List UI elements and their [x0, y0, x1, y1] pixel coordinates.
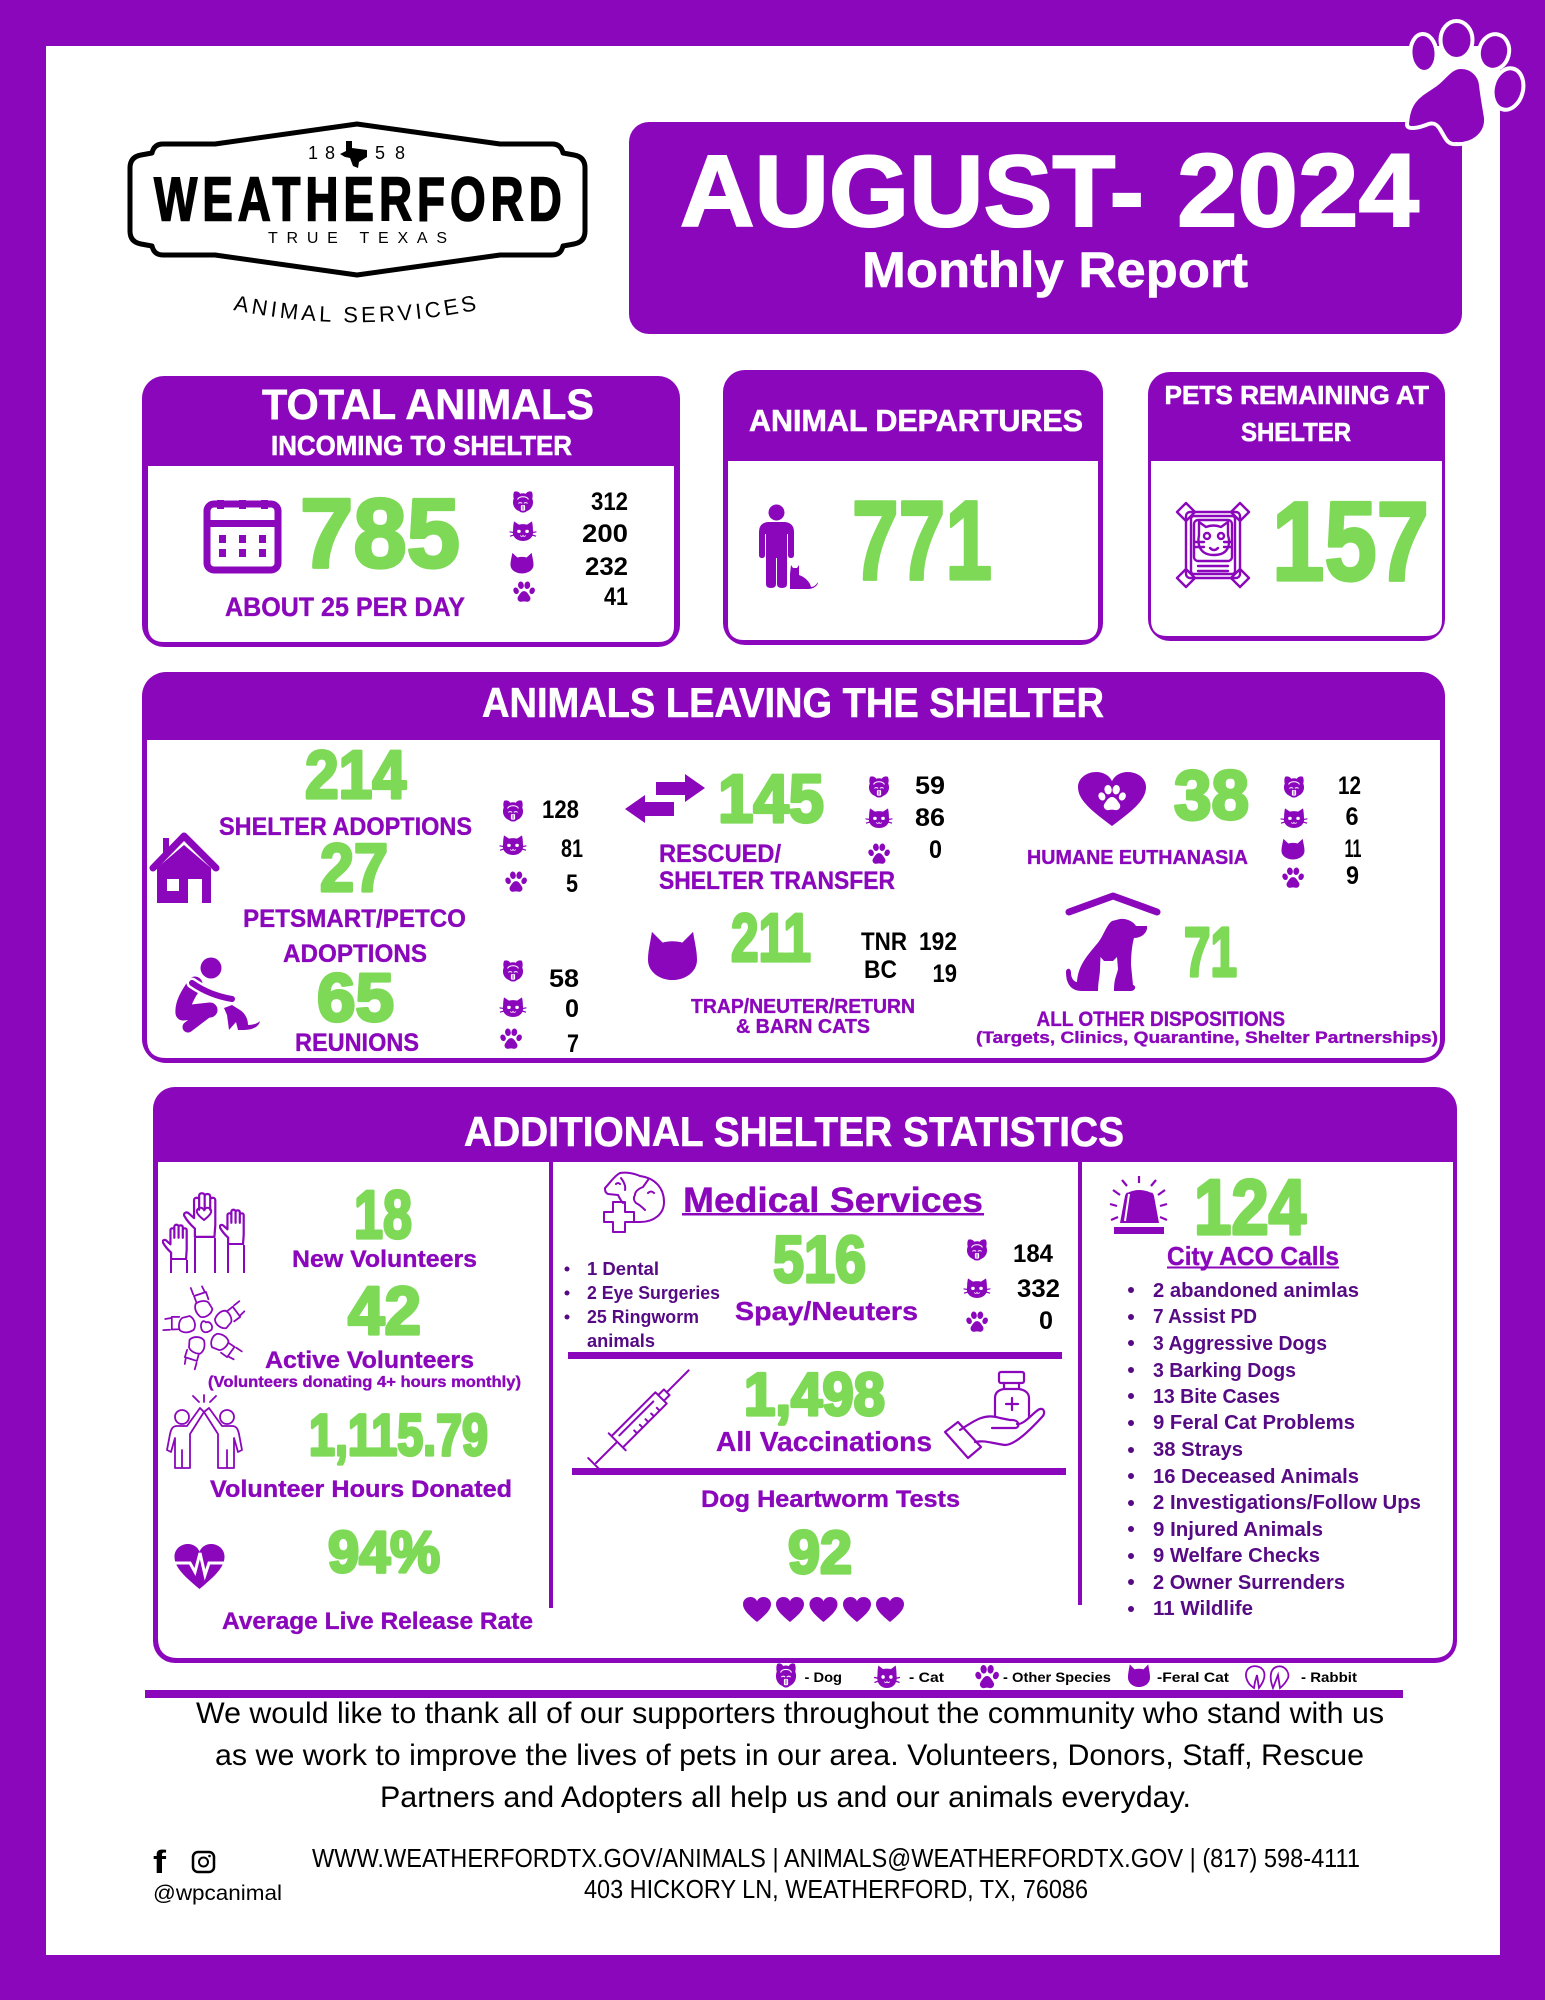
other dispositions label: ALL OTHER DISPOSITIONS: [1036, 1008, 1285, 1031]
euthanasia species counts: 6: [1346, 803, 1358, 831]
aco calls list: 2 Investigations/Follow Ups: [1153, 1492, 1421, 1514]
tnr label line 1: TRAP/NEUTER/RETURN: [691, 995, 915, 1018]
panel frame: [153, 1087, 1457, 1663]
legend: - Cat: [909, 1669, 944, 1685]
main title: 2024: [1177, 133, 1419, 249]
reunion species counts: 0: [565, 995, 579, 1023]
icon: dog and cat under roof: [1066, 896, 1157, 991]
aco calls heading: City ACO Calls: [1167, 1241, 1339, 1271]
main title: [680, 133, 1419, 249]
legend: [776, 1663, 1357, 1688]
active volunteers label: Active Volunteers: [265, 1347, 474, 1374]
species counts: [510, 488, 628, 611]
heartworm count: 92: [788, 1519, 852, 1586]
euthanasia label: HUMANE EUTHANASIA: [1027, 847, 1248, 869]
animal services curved text: ANIMAL SERVICES: [233, 296, 476, 322]
icon: circle of hands: [162, 1286, 248, 1371]
aco calls list: 9 Welfare Checks: [1153, 1545, 1320, 1567]
main title: AUGUST-: [680, 136, 1144, 248]
volunteer hours count: 1,115.79: [309, 1403, 488, 1468]
panel body: [148, 466, 674, 642]
icon: corner paw: [1407, 21, 1528, 144]
species counts: 41: [604, 583, 628, 611]
heading: ANIMALS LEAVING THE SHELTER: [482, 679, 1104, 726]
panel frame: [1148, 372, 1445, 641]
rescued species counts: 0: [929, 836, 942, 864]
tnr and barn cat counts: 192: [919, 928, 957, 956]
panel: additional shelter statistics: [153, 1087, 1457, 1663]
remaining 157: 157: [1272, 479, 1429, 604]
logo year right: 58: [375, 143, 405, 163]
adoption species counts: [500, 796, 583, 898]
euthanasia count: 38: [1174, 756, 1249, 834]
aco calls list: 9 Feral Cat Problems: [1153, 1412, 1355, 1434]
logo wordmark: WEATHERFORD: [154, 165, 562, 234]
reunion species counts: 58: [549, 965, 579, 993]
panel frame: [142, 376, 680, 647]
rescued label line 2: SHELTER TRANSFER: [659, 867, 895, 895]
icon: syringe: [586, 1362, 697, 1473]
logo tagline: TRUE TEXAS: [268, 230, 447, 247]
medical procedures list: 1 Dental: [587, 1259, 659, 1279]
adoption species counts: 5: [566, 870, 578, 898]
legend: -Feral Cat: [1157, 1669, 1229, 1685]
aco calls count: 124: [1194, 1163, 1306, 1251]
thank you message: Partners and Adopters all help us and our animals everyday.: [380, 1781, 1191, 1814]
logo badge outline: [130, 124, 585, 275]
social icons and handle: @wpcanimal: [153, 1882, 282, 1905]
tnr and barn cat counts: 19: [932, 960, 957, 988]
rescued species counts: 59: [915, 772, 945, 800]
thank you message: We would like to thank all of our supporters throughout the community who stand with us: [196, 1697, 1384, 1730]
title banner: [629, 122, 1462, 334]
rescued label line 1: RESCUED/: [659, 840, 781, 868]
icon: siren: [1110, 1176, 1167, 1234]
heading line 1: PETS REMAINING AT: [1164, 380, 1429, 410]
hearts row: [743, 1597, 904, 1622]
panel: animal departures: [723, 370, 1103, 645]
euthanasia species counts: 9: [1346, 862, 1359, 890]
species counts: 232: [585, 553, 628, 581]
tnr and barn cat counts: BC: [864, 956, 897, 984]
tnr count: 211: [731, 900, 811, 976]
rescued species counts: [866, 772, 945, 864]
volunteer hours label: Volunteer Hours Donated: [210, 1476, 512, 1503]
departures 771: 771: [852, 478, 992, 603]
species counts: 312: [591, 488, 628, 516]
legend: - Other Species: [1003, 1669, 1111, 1685]
reunion species counts: 7: [567, 1030, 579, 1058]
reunions count: 65: [317, 960, 394, 1036]
heading: ANIMAL DEPARTURES: [749, 403, 1083, 438]
aco calls list: 9 Injured Animals: [1153, 1519, 1323, 1541]
medical procedures list: 2 Eye Surgeries: [587, 1283, 720, 1303]
panel frame: [142, 672, 1445, 1063]
panel body: [728, 461, 1098, 640]
thank you message: [196, 1697, 1384, 1814]
social icons and handle: [153, 1844, 282, 1905]
active volunteers count: 42: [348, 1273, 421, 1349]
tnr and barn cat counts: [861, 928, 957, 988]
total 785: 785: [300, 478, 460, 588]
icon: calendar: [207, 500, 278, 570]
icon: transfer arrows: [625, 774, 705, 823]
icon: heart with paw: [1078, 772, 1146, 826]
subheading: INCOMING TO SHELTER: [271, 430, 572, 461]
vaccinations label: All Vaccinations: [716, 1426, 932, 1457]
contact information: 403 HICKORY LN, WEATHERFORD, TX, 76086: [584, 1874, 1088, 1904]
panel: total animals: [142, 376, 680, 647]
spay neuter count: 516: [773, 1222, 866, 1296]
live release rate value: 94%: [328, 1520, 440, 1585]
euthanasia species counts: 11: [1344, 835, 1362, 863]
aco calls list: 7 Assist PD: [1153, 1306, 1257, 1328]
banner background: [629, 122, 1462, 334]
other dispositions note: (Targets, Clinics, Quarantine, Shelter Partnerships): [976, 1028, 1438, 1047]
tnr label line 2: & BARN CATS: [736, 1015, 870, 1038]
shelter adoptions label: SHELTER ADOPTIONS: [219, 813, 472, 841]
active volunteers note: (Volunteers donating 4+ hours monthly): [208, 1374, 521, 1391]
contact information: [312, 1843, 1360, 1904]
petsmart label line 1: PETSMART/PETCO: [243, 905, 466, 933]
new volunteers label: New Volunteers: [292, 1246, 477, 1273]
medical procedures list: [564, 1259, 720, 1351]
logo year left: 18: [308, 143, 335, 163]
aco calls list: 2 abandoned animlas: [1153, 1280, 1359, 1302]
heading: ADDITIONAL SHELTER STATISTICS: [464, 1108, 1124, 1155]
medical procedures list: 25 Ringworm: [587, 1307, 699, 1327]
spay neuter species counts: [964, 1239, 1060, 1335]
species counts: 200: [582, 520, 628, 548]
subtitle: Monthly Report: [862, 242, 1248, 298]
icon: house: [153, 836, 216, 903]
adoption species counts: 81: [561, 835, 583, 863]
rescued species counts: 86: [915, 804, 945, 832]
adoption species counts: 128: [542, 796, 579, 824]
petsmart count: 27: [320, 830, 388, 906]
icon: raised hands: [163, 1193, 244, 1273]
euthanasia species counts: 12: [1338, 772, 1361, 800]
heartworm label: Dog Heartworm Tests: [701, 1486, 960, 1513]
spay neuter species counts: 0: [1039, 1307, 1053, 1335]
icon: Texas: [340, 141, 367, 168]
aco calls list: 3 Aggressive Dogs: [1153, 1333, 1327, 1355]
heading: TOTAL ANIMALS: [262, 381, 594, 429]
spay neuter species counts: 184: [1013, 1240, 1053, 1268]
reunion species counts: [499, 960, 579, 1058]
icon: pet medical: [604, 1173, 664, 1232]
panel body: [158, 1162, 1453, 1658]
medical procedures list: animals: [587, 1331, 655, 1351]
icon: heart beat: [173, 1544, 226, 1589]
contact information: WWW.WEATHERFORDTX.GOV/ANIMALS | ANIMALS@WEATHERFORDTX.GOV | (817) 598-4111: [312, 1843, 1360, 1873]
petsmart label line 2: ADOPTIONS: [283, 940, 427, 968]
aco calls list: 13 Bite Cases: [1153, 1386, 1280, 1408]
panel frame: [723, 370, 1103, 645]
heading line 2: SHELTER: [1241, 417, 1351, 447]
aco calls list: [1128, 1280, 1421, 1620]
social icons and handle: f: [153, 1844, 166, 1880]
logo: Weatherford True Texas Animal Services: [128, 122, 588, 322]
legend: - Dog: [804, 1669, 842, 1685]
legend: - Rabbit: [1301, 1669, 1357, 1685]
rescued count: 145: [718, 761, 824, 837]
panel body: [147, 740, 1440, 1058]
aco calls list: 16 Deceased Animals: [1153, 1466, 1359, 1488]
icon: person petting dog: [183, 958, 260, 1030]
aco calls list: 38 Strays: [1153, 1439, 1243, 1461]
thank you message: as we work to improve the lives of pets in our area. Volunteers, Donors, Staff, Rescue: [215, 1739, 1364, 1772]
euthanasia species counts: [1280, 772, 1362, 890]
aco calls list: 11 Wildlife: [1153, 1598, 1253, 1620]
medical services heading: Medical Services: [683, 1181, 983, 1220]
icon: feral cat: [648, 932, 697, 980]
panel body: [1151, 461, 1442, 636]
other dispositions count: 71: [1184, 913, 1237, 991]
panel: pets remaining: [1148, 372, 1445, 641]
vaccinations count: 1,498: [744, 1361, 885, 1428]
icon: person with cat: [759, 504, 818, 589]
spay neuter label: Spay/Neuters: [735, 1296, 918, 1326]
live release rate label: Average Live Release Rate: [222, 1608, 533, 1635]
reunions label: REUNIONS: [295, 1029, 419, 1057]
icon: cat in carrier: [1177, 503, 1249, 587]
new volunteers count: 18: [354, 1177, 412, 1253]
aco calls list: 2 Owner Surrenders: [1153, 1572, 1345, 1594]
aco calls list: 3 Barking Dogs: [1153, 1360, 1296, 1382]
per day note: ABOUT 25 PER DAY: [225, 592, 465, 622]
shelter adoptions count: 214: [305, 737, 406, 813]
icon: hand holding vial: [945, 1372, 1044, 1458]
panel: animals leaving the shelter: [142, 672, 1445, 1063]
spay neuter species counts: 332: [1017, 1275, 1060, 1303]
tnr and barn cat counts: TNR: [861, 928, 907, 956]
icon: high five: [167, 1395, 242, 1468]
logo subtitle path: [233, 309, 482, 322]
